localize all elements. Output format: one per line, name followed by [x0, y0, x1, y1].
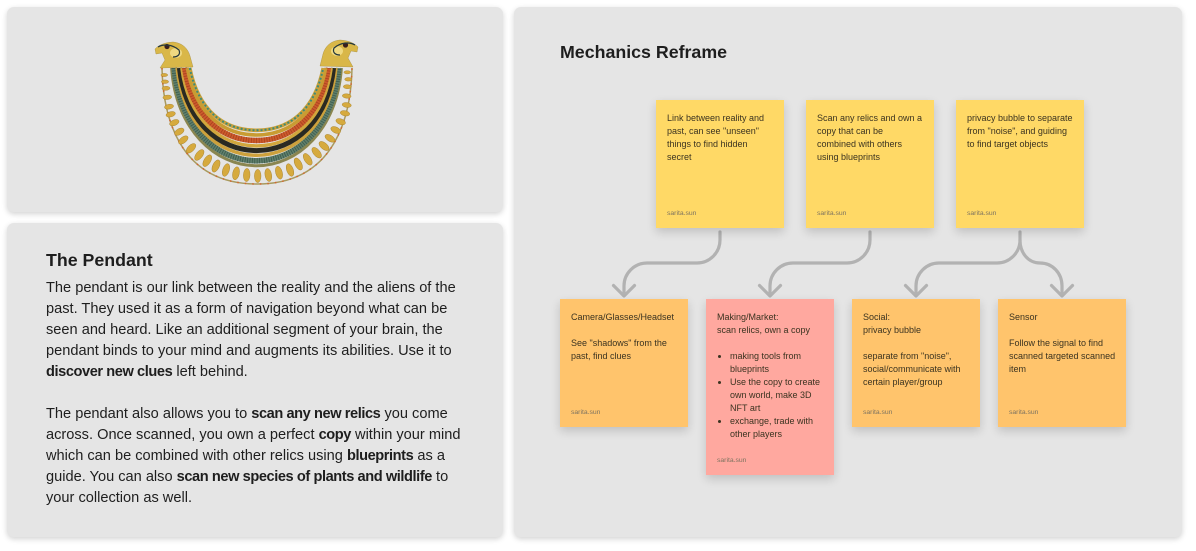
text block: pendant description: your collection as well. [46, 490, 192, 506]
sticky note: scan any relics: copy that can be [817, 126, 883, 136]
text block: pendant description: guide. You can also scan new species of plants and wildlife to [46, 469, 448, 485]
heading: Mechanics Reframe: Mechanics Reframe [560, 42, 727, 62]
panel: pendant image [7, 7, 503, 212]
sticky note: social privacy bubble: sarita.sun [863, 409, 892, 416]
sticky note: making and market: exchange, trade with [730, 416, 813, 426]
sticky note: privacy bubble [956, 100, 1084, 228]
sticky note: making and market: sarita.sun [717, 457, 746, 464]
sticky note: sensor: item [1009, 364, 1026, 374]
left falcon head [155, 42, 193, 68]
sticky note: scan any relics: Scan any relics and own a [817, 113, 922, 123]
sticky note: link between reality and past [656, 100, 784, 228]
sticky note: making and market: scan relics, own a copy [717, 325, 810, 335]
sticky note: social privacy bubble: social/communicate with [863, 364, 961, 374]
text block: pendant description [46, 280, 460, 506]
arrow: privacy note to social note [906, 232, 1020, 296]
sticky note: social privacy bubble: privacy bubble [863, 325, 921, 335]
sticky note: scan any relics: combined with others [817, 139, 902, 149]
sticky note: making and market: other players [730, 429, 782, 439]
sticky note: link between reality and past: past, can see "unseen" [667, 126, 759, 136]
text block: pendant description: past. They used it as a form of navigation beyond what can be [46, 301, 447, 317]
text block: pendant description: seen and heard. Like an additional segment of your brain, the [46, 322, 443, 338]
sticky note: privacy bubble: to find target objects [967, 139, 1048, 149]
sticky note: social privacy bubble: Social: [863, 312, 890, 322]
sticky note: sensor: sarita.sun [1009, 409, 1038, 416]
sticky note: link between reality and past: things to find hidden [667, 139, 748, 149]
heading: The Pendant: The Pendant [46, 250, 153, 270]
sticky note: privacy bubble: privacy bubble to separate [967, 113, 1073, 123]
sticky note: camera glasses headset: past, find clues [571, 351, 631, 361]
sticky note: scan any relics [806, 100, 934, 228]
arrow: scan note to making note [760, 232, 870, 296]
panel: mechanics reframe [514, 7, 1182, 537]
sticky note: making and market: Use the copy to create [730, 377, 820, 387]
arrow: privacy note to sensor note [1020, 240, 1072, 296]
sticky note: link between reality and past: sarita.sun [667, 210, 696, 217]
sticky note: making and market: Making/Market: [717, 312, 779, 322]
sticky note: scan any relics: using blueprints [817, 152, 880, 162]
text block: pendant description: which can be combined with other relics using blueprints as a [46, 448, 445, 464]
right falcon head [320, 40, 358, 67]
sticky note: making and market: making tools from [730, 351, 801, 361]
sticky note: sensor: Follow the signal to find [1009, 338, 1103, 348]
sticky note: privacy bubble: from "noise", and guiding [967, 126, 1067, 136]
sticky note: making and market: NFT art [730, 403, 760, 413]
sticky note: privacy bubble: sarita.sun [967, 210, 996, 217]
text block: pendant description: pendant binds to your mind and augments its abilities. Use it to [46, 343, 452, 359]
sticky note: camera glasses headset [560, 299, 688, 427]
sticky note: sensor: scanned targeted scanned [1009, 351, 1115, 361]
sticky note: making and market: own world, make 3D [730, 390, 812, 400]
sticky note: scan any relics: sarita.sun [817, 210, 846, 217]
text block: pendant description: The pendant is our link between the reality and the aliens of the [46, 280, 456, 296]
sticky note: sensor: Sensor [1009, 312, 1038, 322]
sticky note: social privacy bubble: separate from "noise", [863, 351, 951, 361]
arrow: reality note to camera note [614, 232, 720, 296]
sticky note: camera glasses headset: See "shadows" from the [571, 338, 667, 348]
sticky note: social privacy bubble [852, 299, 980, 427]
sticky note: camera glasses headset: sarita.sun [571, 409, 600, 416]
panel: pendant description [7, 223, 503, 537]
sticky note: making and market: blueprints [730, 364, 769, 374]
sticky note: link between reality and past: Link between reality and [667, 113, 764, 123]
sticky note: making and market [706, 299, 834, 475]
text block: pendant description: The pendant also allows you to scan any new relics you come [46, 406, 448, 422]
text block: pendant description: across. Once scanned, you own a perfect copy within your mind [46, 427, 460, 443]
sticky note: link between reality and past: secret [667, 152, 692, 162]
sticky note: sensor [998, 299, 1126, 427]
text block: pendant description: discover new clues left behind. [46, 364, 248, 380]
sticky note: social privacy bubble: certain player/group [863, 377, 943, 387]
sticky note: camera glasses headset: Camera/Glasses/Headset [571, 312, 674, 322]
